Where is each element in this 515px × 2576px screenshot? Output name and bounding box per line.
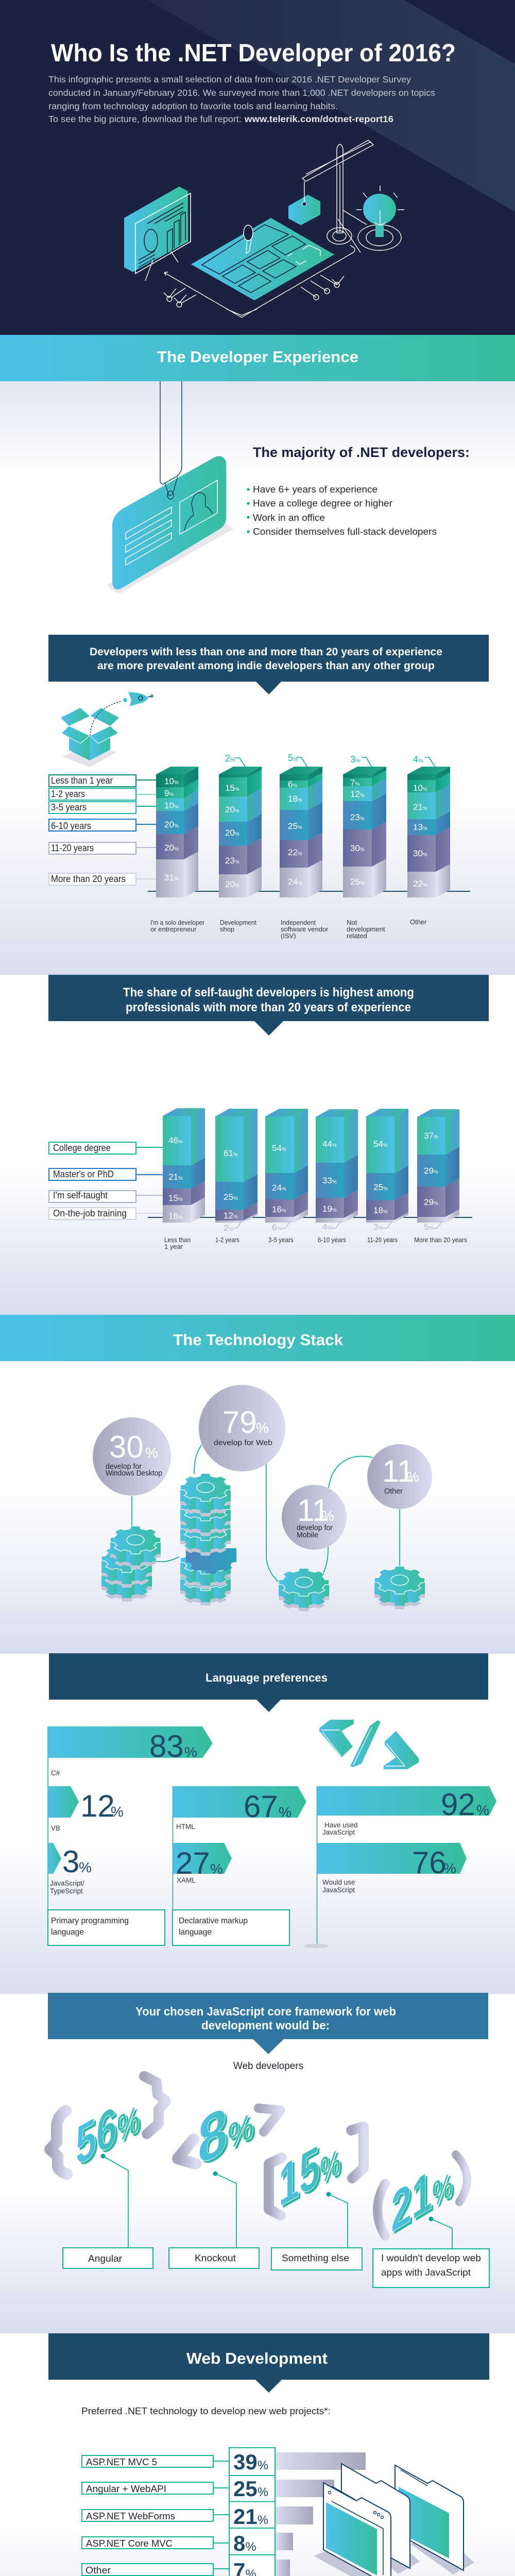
legend: experience: 11-20 years bbox=[51, 843, 94, 853]
box: declarative markup language bbox=[173, 1910, 289, 1945]
bar: 3-5 years: 54% bbox=[272, 1143, 286, 1153]
arrow: C#: 83 bbox=[149, 1729, 184, 1764]
bar: more than 20 years bbox=[414, 1109, 467, 1244]
intro text: www.telerik.com/dotnet-report16 bbox=[244, 114, 393, 124]
callout: self-taught developers: professionals with more than 20 years of experience bbox=[126, 1001, 411, 1014]
text: web question: Preferred .NET technology to develop new web projects*: bbox=[81, 2405, 331, 2416]
arrow: have used JavaScript: JavaScript bbox=[322, 1828, 355, 1836]
bar: solo developer: 10% bbox=[164, 801, 179, 810]
bar: other bbox=[407, 754, 450, 926]
arrow: would use JavaScript: 76 bbox=[412, 1845, 447, 1880]
figure: no JavaScript 21% bbox=[377, 2145, 467, 2249]
bar: development shop bbox=[219, 753, 262, 933]
icon: code tag bbox=[319, 1720, 419, 1769]
bar: independent software vendor: 6% bbox=[288, 779, 297, 789]
legend: education: Master's or PhD bbox=[53, 1169, 114, 1179]
bar: solo developer: 31% bbox=[164, 873, 179, 883]
box: primary programming language: language bbox=[51, 1928, 84, 1937]
arrow: JavaScript/TypeScript: % bbox=[79, 1859, 92, 1875]
callout: JavaScript core framework: development would be: bbox=[201, 2019, 330, 2032]
bar: independent software vendor: (ISV) bbox=[281, 932, 296, 940]
bar: other: Other bbox=[410, 918, 427, 926]
banner: Web Development bbox=[48, 2333, 489, 2393]
arrow: would use JavaScript bbox=[317, 1843, 467, 1894]
bar: less than 1 year: 46% bbox=[168, 1136, 183, 1145]
bar: not development related: 23% bbox=[350, 812, 365, 822]
legend: education bbox=[49, 1142, 163, 1219]
bar: solo developer: 9% bbox=[164, 788, 174, 798]
intro text: This infographic presents a small selection of data from our 2016 .NET Developer Survey bbox=[48, 74, 411, 84]
legend: experience: More than 20 years bbox=[51, 874, 126, 884]
figure: Something else 15%: 15% bbox=[281, 2123, 342, 2222]
bar: more than 20 years: 5% bbox=[424, 1222, 434, 1232]
box: Angular bbox=[63, 2248, 153, 2268]
bar: not development related: 12% bbox=[350, 789, 365, 799]
banner: The Technology Stack bbox=[0, 1315, 515, 1361]
figure: Knockout 8%: 8% bbox=[200, 2079, 256, 2182]
legend: education: On-the-job training bbox=[53, 1208, 127, 1218]
circle: windows desktop: develop for bbox=[106, 1462, 142, 1471]
intro text: conducted in January/February 2016. We surveyed more than 1,000 .NET developers on topics bbox=[48, 88, 435, 98]
banner: The Technology Stack: The Technology Stack bbox=[173, 1331, 344, 1349]
box: declarative markup language: Declarative markup bbox=[179, 1917, 248, 1925]
figure: Knockout 8% bbox=[178, 2077, 281, 2248]
row: ASP.NET Core MVC bbox=[82, 2528, 275, 2555]
arrow: have used JavaScript: Have used bbox=[324, 1821, 358, 1829]
circle: windows desktop: Windows Desktop bbox=[106, 1469, 162, 1478]
bar: solo developer: 20% bbox=[164, 820, 179, 829]
gears: center tower bbox=[180, 1473, 236, 1606]
bar: more than 20 years: 29% bbox=[424, 1197, 438, 1207]
bar: not development related: Not bbox=[347, 919, 357, 926]
arrow: C#: C# bbox=[51, 1769, 60, 1777]
bar: 1-2 years: 2% bbox=[224, 1223, 233, 1233]
box: primary programming language bbox=[48, 1910, 165, 1945]
figure: Something else 15%: 15% bbox=[279, 2121, 340, 2219]
box: Knockout bbox=[169, 2248, 259, 2268]
text: majority of .NET developers: Work in an office bbox=[253, 512, 325, 523]
circle: windows desktop bbox=[93, 1417, 171, 1496]
arrow: have used JavaScript: % bbox=[476, 1802, 489, 1818]
bar: development shop: 20% bbox=[225, 828, 239, 838]
icon: box with rocket bbox=[61, 692, 153, 767]
bar: 6-10 years: 4% bbox=[322, 1222, 332, 1232]
bar: 1-2 years: 1-2 years bbox=[215, 1236, 239, 1244]
row: ASP.NET WebForms: 21% bbox=[233, 2504, 268, 2529]
bar: 6-10 years: 6-10 years bbox=[318, 1236, 346, 1244]
circle: other: 11 bbox=[382, 1454, 414, 1488]
bar: solo developer bbox=[150, 767, 205, 933]
callout: language preferences bbox=[49, 1653, 488, 1712]
bar: development shop: 23% bbox=[225, 856, 239, 866]
bar: independent software vendor: 24% bbox=[288, 877, 302, 887]
banner: The Developer Experience: The Developer Experience bbox=[157, 348, 358, 366]
bar: more than 20 years: More than 20 years bbox=[414, 1236, 467, 1244]
legend: experience: 6-10 years bbox=[51, 821, 91, 831]
gears: left tower bbox=[101, 1526, 161, 1602]
bar: development shop: 2% bbox=[225, 753, 235, 764]
icon: crane and cube bbox=[288, 140, 373, 252]
callout: indie developers bbox=[48, 635, 489, 694]
bar: not development related: 7% bbox=[350, 778, 359, 788]
icon: tablet bbox=[191, 218, 334, 300]
arrow: HTML: 67 bbox=[244, 1789, 278, 1824]
figure: no JavaScript 21%: 21% bbox=[393, 2147, 455, 2247]
diagram: technology stack bbox=[93, 1385, 432, 1612]
circle: other bbox=[367, 1444, 432, 1509]
bar: other: 4% bbox=[413, 754, 423, 765]
icon: diagram arrows and checks bbox=[164, 245, 355, 317]
text: majority of .NET developers bbox=[247, 445, 470, 537]
bar: less than 1 year bbox=[163, 1108, 205, 1250]
circle: other: % bbox=[406, 1469, 419, 1485]
arrow: XAML: % bbox=[210, 1861, 223, 1877]
box: Knockout: Knockout bbox=[195, 2253, 236, 2263]
arrow: VB: % bbox=[111, 1804, 124, 1820]
legend: experience: 3-5 years bbox=[51, 802, 87, 812]
row: ASP.NET MVC 5: ASP.NET MVC 5 bbox=[86, 2457, 157, 2467]
chart: language preferences bbox=[48, 1720, 496, 1948]
callout: indie developers: are more prevalent among indie developers than any other group bbox=[97, 659, 435, 672]
text: majority of .NET developers: Consider themselves full-stack developers bbox=[253, 526, 437, 537]
gears: single bbox=[279, 1566, 425, 1612]
bar: solo developer: 20% bbox=[164, 843, 179, 853]
arrow: HTML bbox=[173, 1786, 306, 1831]
row: Angular + WebAPI bbox=[82, 2476, 275, 2502]
text: web developers: Web developers bbox=[233, 2061, 303, 2072]
row: Other bbox=[82, 2555, 275, 2576]
figure: Something else 15% bbox=[269, 2121, 364, 2248]
row: ASP.NET WebForms bbox=[82, 2502, 275, 2529]
bar: independent software vendor: 5% bbox=[288, 753, 298, 763]
box: Something else: Something else bbox=[282, 2253, 349, 2263]
row: ASP.NET Core MVC: ASP.NET Core MVC bbox=[86, 2538, 173, 2549]
circle: web: develop for Web bbox=[214, 1438, 272, 1447]
arrow: XAML: 27 bbox=[176, 1846, 210, 1880]
bar: more than 20 years: 37% bbox=[424, 1131, 438, 1141]
row: ASP.NET WebForms: ASP.NET WebForms bbox=[86, 2511, 175, 2521]
legend: experience: Less than 1 year bbox=[51, 775, 113, 786]
callout: JavaScript core framework bbox=[48, 1993, 488, 2054]
circle: mobile bbox=[282, 1485, 347, 1550]
arrow: XAML: XAML bbox=[177, 1876, 196, 1884]
bar: 11-20 years: 18% bbox=[373, 1206, 388, 1215]
text: majority of .NET developers: Have 6+ years of experience bbox=[253, 484, 377, 495]
circle: web: % bbox=[256, 1420, 269, 1436]
bar: development shop: 20% bbox=[225, 805, 239, 815]
bar: not development related: development bbox=[347, 925, 385, 933]
bar: 1-2 years: 12% bbox=[224, 1211, 238, 1221]
bar: solo developer: or entrepreneur bbox=[150, 925, 197, 933]
arrow: JavaScript/TypeScript: 3 bbox=[62, 1844, 79, 1879]
box: declarative markup language: language bbox=[179, 1928, 212, 1937]
arrow: XAML bbox=[173, 1843, 232, 1884]
bar: less than 1 year: 18% bbox=[168, 1211, 183, 1221]
bar: 1-2 years: 25% bbox=[224, 1192, 238, 1202]
bar: 6-10 years: 19% bbox=[322, 1204, 337, 1214]
text: majority of .NET developers: Have a college degree or higher bbox=[253, 498, 392, 509]
text: majority of .NET developers: The majority of .NET developers: bbox=[253, 445, 470, 460]
arrow: VB: 12 bbox=[80, 1789, 115, 1823]
bar: independent software vendor: software vendor bbox=[281, 925, 329, 933]
bar: less than 1 year: 15% bbox=[168, 1193, 183, 1203]
bar: independent software vendor bbox=[280, 753, 329, 940]
chart: education by experience bbox=[49, 1108, 472, 1250]
circle: web: 79 bbox=[222, 1405, 257, 1439]
box: would not develop with JavaScript: apps with JavaScript bbox=[381, 2267, 471, 2278]
bar: independent software vendor: 18% bbox=[288, 794, 302, 804]
arrow: JavaScript/TypeScript bbox=[48, 1843, 92, 1895]
intro text: ranging from technology adoption to favorite tools and learning habits. bbox=[48, 101, 338, 111]
icon: ID badge bbox=[107, 381, 233, 594]
bar: other: 13% bbox=[413, 822, 427, 832]
connectors bbox=[214, 2461, 229, 2569]
arrow: would use JavaScript: % bbox=[443, 1860, 456, 1876]
legend: education: College degree bbox=[53, 1143, 111, 1153]
bar: 6-10 years bbox=[316, 1109, 358, 1244]
figure: Angular 56%: 56% bbox=[76, 2081, 140, 2178]
banner: The Developer Experience bbox=[0, 335, 515, 381]
connectors bbox=[132, 1445, 400, 1582]
bar: 6-10 years: 33% bbox=[322, 1176, 337, 1185]
bar: 11-20 years: 3% bbox=[373, 1222, 383, 1232]
box: Something else bbox=[271, 2248, 362, 2270]
title: Who Is the .NET Developer of 2016? bbox=[51, 40, 456, 67]
bar: less than 1 year: 21% bbox=[168, 1172, 183, 1182]
bar: development shop: 20% bbox=[225, 879, 239, 889]
bar: 11-20 years: 25% bbox=[373, 1182, 388, 1192]
bar: other: 30% bbox=[413, 849, 427, 858]
callout: indie developers: Developers with less than one and more than 20 years of experience bbox=[90, 646, 442, 658]
row: ASP.NET MVC 5 bbox=[82, 2448, 275, 2476]
legend: education: I'm self-taught bbox=[53, 1190, 108, 1200]
chart: web technology bbox=[82, 2448, 366, 2576]
bar: not development related: 30% bbox=[350, 843, 365, 853]
arrow: VB bbox=[48, 1786, 124, 1832]
icon: presentation board bbox=[124, 187, 191, 281]
bars bbox=[275, 2452, 366, 2576]
arrow: have used JavaScript bbox=[317, 1786, 496, 1836]
bar: 3-5 years bbox=[265, 1109, 308, 1244]
callout: JavaScript core framework: Your chosen JavaScript core framework for web bbox=[135, 2005, 396, 2018]
panel: hero bbox=[0, 0, 515, 335]
arrow: HTML: % bbox=[279, 1804, 291, 1820]
arrow: would use JavaScript: Would use bbox=[322, 1878, 355, 1886]
legend: experience bbox=[49, 775, 156, 885]
icon: lightbulb bbox=[356, 185, 404, 250]
row: ASP.NET Core MVC: 8% bbox=[233, 2531, 256, 2555]
bar: less than 1 year: 1 year bbox=[164, 1243, 183, 1250]
circle: windows desktop: % bbox=[145, 1445, 158, 1461]
row: ASP.NET MVC 5: 39% bbox=[233, 2450, 268, 2474]
bar: not development related: 25% bbox=[350, 877, 365, 887]
icon: browser windows bbox=[314, 2464, 474, 2576]
figure: Knockout 8%: 8% bbox=[198, 2077, 254, 2180]
bar: 3-5 years: 24% bbox=[272, 1183, 286, 1193]
row: Angular + WebAPI: 25% bbox=[233, 2477, 268, 2501]
bar: development shop: 15% bbox=[225, 783, 239, 793]
row: Angular + WebAPI: Angular + WebAPI bbox=[86, 2484, 166, 2494]
bar: 3-5 years: 3-5 years bbox=[268, 1236, 294, 1244]
figure: no JavaScript 21%: 21% bbox=[391, 2145, 453, 2245]
circle: other: Other bbox=[384, 1487, 403, 1496]
bar: more than 20 years: 29% bbox=[424, 1166, 438, 1176]
intro text bbox=[48, 74, 435, 124]
bar: development shop: shop bbox=[220, 925, 234, 933]
arrow: JavaScript/TypeScript: JavaScript/ bbox=[50, 1879, 84, 1887]
arrow: JavaScript/TypeScript: TypeScript bbox=[50, 1887, 83, 1895]
intro text: To see the big picture, download the full report: bbox=[48, 114, 242, 124]
callout: self-taught developers: The share of self-taught developers is highest among bbox=[123, 986, 414, 999]
figure: Angular 56%: 56% bbox=[78, 2083, 142, 2180]
bar: 3-5 years: 6% bbox=[272, 1223, 282, 1232]
bar: 3-5 years: 16% bbox=[272, 1205, 286, 1214]
bar: 6-10 years: 44% bbox=[322, 1139, 337, 1149]
arrow: VB: VB bbox=[51, 1824, 60, 1832]
box: would not develop with JavaScript: I wouldn't develop web bbox=[381, 2253, 481, 2263]
chart: experience by company type bbox=[49, 753, 470, 940]
bar: less than 1 year: Less than bbox=[164, 1236, 191, 1244]
bar: 11-20 years bbox=[366, 1109, 408, 1244]
bar: not development related: 3% bbox=[350, 754, 360, 765]
arrow: C#: % bbox=[184, 1744, 197, 1760]
arrow: have used JavaScript: 92 bbox=[441, 1787, 475, 1822]
arrow: C# bbox=[48, 1726, 213, 1777]
arrow: HTML: HTML bbox=[176, 1823, 195, 1831]
circle: windows desktop: 30 bbox=[109, 1430, 144, 1464]
banner: Web Development: Web Development bbox=[186, 2349, 328, 2367]
box: primary programming language: Primary programming bbox=[51, 1917, 129, 1925]
callout: language preferences: Language preferences bbox=[205, 1671, 328, 1684]
circle: mobile: develop for bbox=[297, 1523, 333, 1532]
row: Other: Other bbox=[85, 2565, 111, 2575]
bar: 11-20 years: 11-20 years bbox=[367, 1236, 398, 1244]
bar: development shop: Development bbox=[220, 919, 256, 926]
bar: 1-2 years: 61% bbox=[224, 1148, 238, 1158]
circle: mobile: 11 bbox=[297, 1493, 329, 1528]
bar: 1-2 years bbox=[215, 1109, 258, 1244]
box: Angular: Angular bbox=[88, 2253, 122, 2264]
bar: other: 22% bbox=[413, 879, 427, 889]
arrow: would use JavaScript: JavaScript bbox=[322, 1886, 355, 1894]
circle: mobile: % bbox=[321, 1508, 334, 1524]
bar: not development related bbox=[343, 754, 386, 940]
bar: independent software vendor: 25% bbox=[288, 821, 302, 831]
bar: independent software vendor: 22% bbox=[288, 848, 302, 857]
bar: independent software vendor: Independent bbox=[281, 919, 316, 926]
bar: other: 10% bbox=[413, 783, 427, 793]
bar: solo developer: I'm a solo developer bbox=[150, 919, 205, 926]
callout: self-taught developers bbox=[48, 975, 489, 1036]
bar: 11-20 years: 54% bbox=[373, 1139, 388, 1149]
bar: not development related: related bbox=[347, 932, 367, 940]
bar: solo developer: 10% bbox=[164, 776, 179, 786]
circle: web bbox=[199, 1385, 285, 1471]
box: would not develop with JavaScript bbox=[373, 2249, 489, 2287]
bar: other: 21% bbox=[413, 802, 427, 812]
figure: Angular 56% bbox=[50, 2076, 166, 2248]
circle: mobile: Mobile bbox=[297, 1531, 318, 1539]
legend: experience: 1-2 years bbox=[51, 789, 85, 799]
